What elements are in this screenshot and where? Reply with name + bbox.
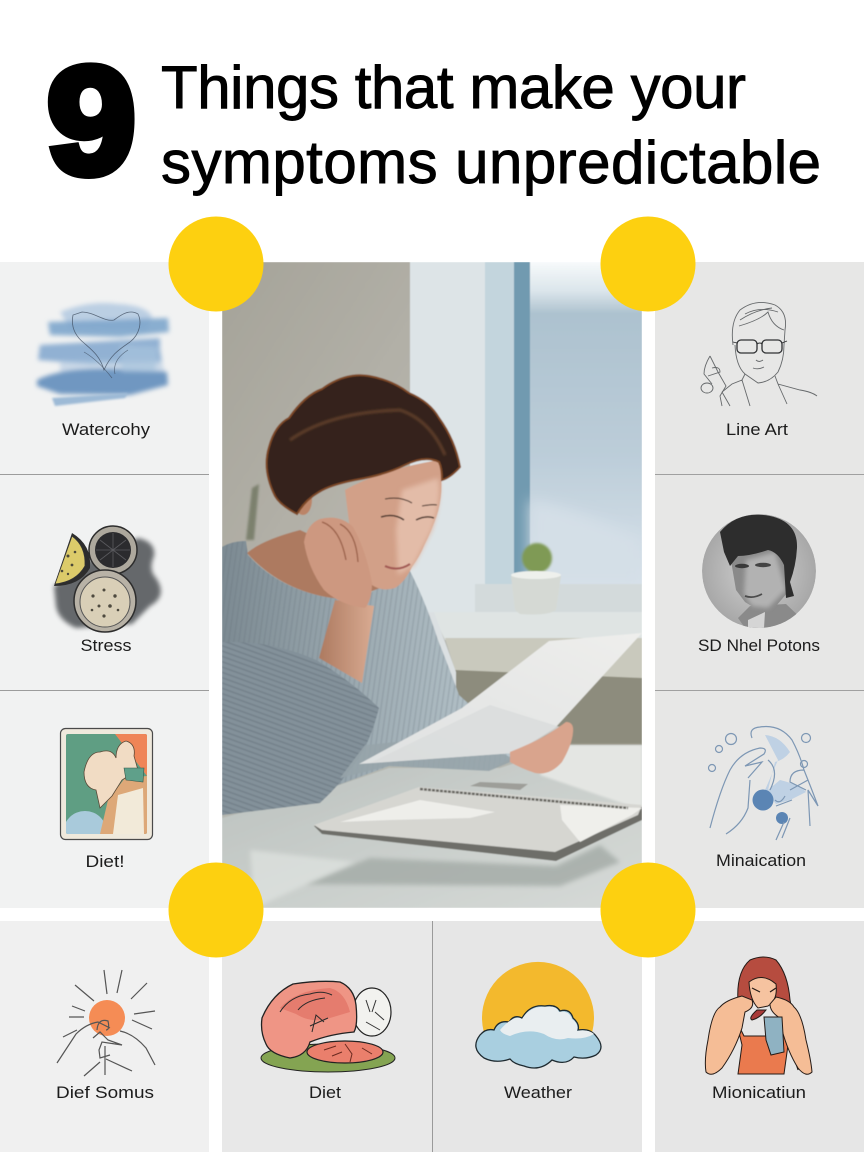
heading text: Things that make your [161, 54, 746, 121]
big number 9: 9 [47, 36, 136, 206]
hand holding paper [510, 722, 573, 774]
icon: hand and sun rays [57, 970, 155, 1076]
face [345, 460, 442, 589]
ledge [432, 612, 642, 640]
panel: hand and sun [0, 921, 209, 1152]
icon: illustrated card [60, 728, 152, 855]
label: Line Art [726, 420, 788, 439]
photo contents with soft focus [222, 262, 642, 908]
background plant stem [246, 484, 259, 540]
title [47, 36, 821, 206]
yellow circle bottom left [168, 862, 264, 958]
window view [530, 262, 642, 584]
icon: line art portrait [701, 302, 817, 406]
photo: woman reading a paper by a window [222, 262, 642, 908]
hand at cheek [304, 518, 372, 608]
yellow circle top right [600, 216, 696, 312]
label: Mionicatiun [712, 1083, 806, 1102]
folder on table [314, 782, 642, 861]
icon: meat and plate [261, 981, 395, 1072]
icon: sun and cloud [476, 962, 601, 1068]
sweater [222, 541, 515, 815]
panel: watercolor heart [0, 262, 209, 474]
icon: grayscale portrait [702, 514, 816, 632]
pillar [410, 262, 486, 622]
view haze [521, 495, 592, 572]
icon: stress plates [54, 526, 161, 632]
ledge dark underside [455, 670, 642, 746]
plant in pot [511, 543, 561, 614]
hair [267, 375, 460, 514]
bottom column divider [432, 921, 433, 1152]
label: Weather [504, 1083, 572, 1102]
sweater sleeve [222, 642, 379, 815]
heading text [161, 54, 821, 196]
eyes and mouth [381, 498, 437, 569]
window frame [485, 262, 516, 597]
neck and chest [247, 530, 380, 598]
panel: stress [0, 475, 209, 690]
label: SD Nhel Potons [698, 636, 820, 655]
label: Minaication [716, 851, 806, 870]
heading text: symptoms unpredictable [161, 129, 821, 196]
label: Stress [80, 636, 132, 655]
paper [359, 633, 642, 764]
icon: watercolor heart [37, 303, 169, 406]
panel: diet illustrated card [0, 691, 209, 908]
yellow circle top left [168, 216, 264, 312]
label: Diet [309, 1083, 341, 1102]
yellow circle bottom right [600, 862, 696, 958]
photo base [222, 562, 513, 818]
label: Dief Somus [56, 1083, 154, 1102]
panel: weather [432, 921, 642, 1152]
label: Watercohy [62, 420, 151, 439]
label: Diet! [86, 852, 124, 871]
forearm [319, 600, 374, 683]
panel: medication hands [655, 691, 864, 908]
ear [298, 498, 312, 516]
table [222, 745, 642, 908]
panel: diet [222, 921, 432, 1152]
panel: portrait [655, 475, 864, 690]
icon: woman with bottle [705, 957, 812, 1074]
icon: hands and pills [708, 727, 818, 840]
panel: line art [655, 262, 864, 474]
wall [222, 262, 412, 562]
panel: medication woman [655, 921, 864, 1152]
window sill [475, 584, 642, 612]
